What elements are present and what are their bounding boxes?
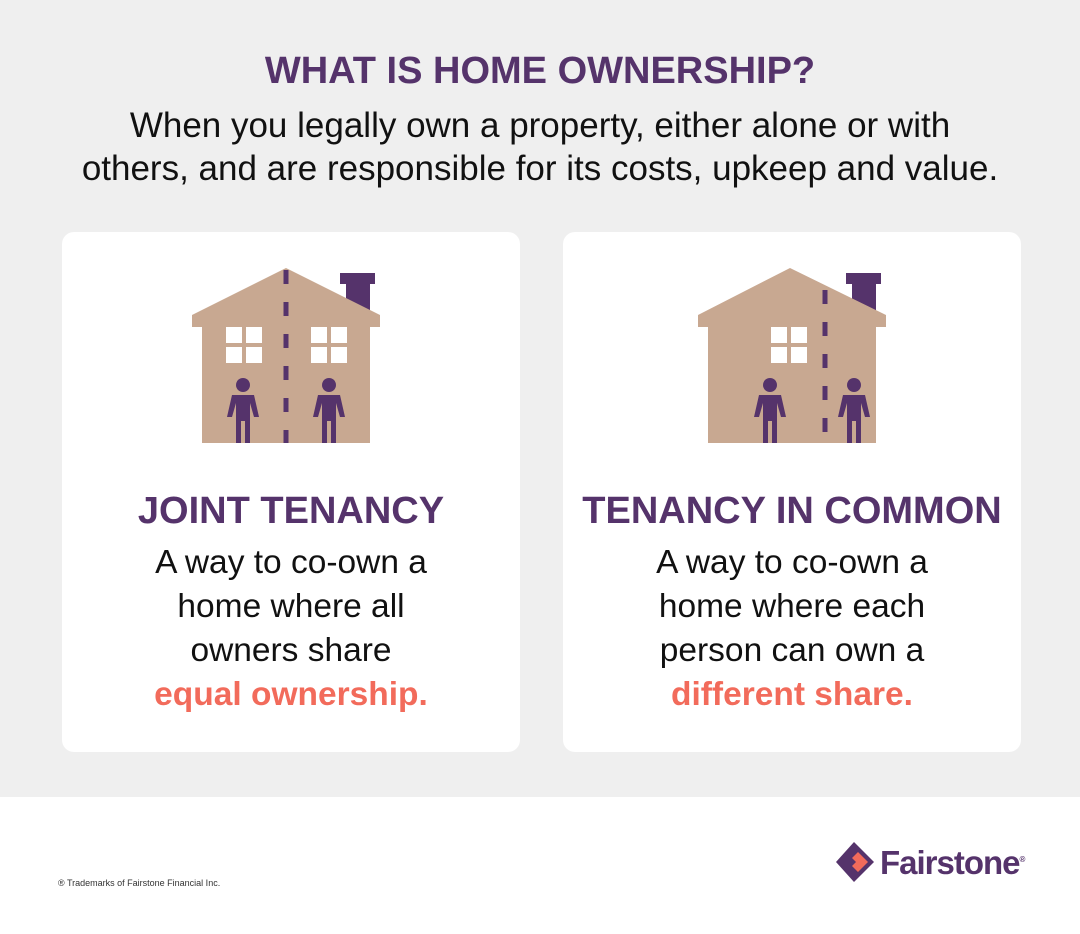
text: A way to co-own a (155, 544, 427, 581)
heading: JOINT TENANCY (138, 490, 444, 532)
icon: house split equally (192, 268, 380, 443)
text: A way to co-own a (656, 544, 928, 581)
text: different share. (671, 676, 913, 713)
text: home where each (659, 588, 925, 625)
subtitle: When you legally own a property, either alone or with (130, 106, 950, 145)
text (154, 544, 428, 713)
title: WHAT IS HOME OWNERSHIP? (265, 50, 815, 92)
text (656, 544, 928, 713)
footnote: ® Trademarks of Fairstone Financial Inc. (58, 878, 220, 888)
icon: house split unequally (698, 268, 886, 443)
panel: tenancy in common (563, 232, 1021, 752)
panel: joint tenancy (62, 232, 520, 752)
text: owners share (190, 632, 392, 669)
text: equal ownership. (154, 676, 428, 713)
heading: TENANCY IN COMMON (582, 490, 1002, 532)
text: home where all (177, 588, 405, 625)
subtitle (82, 106, 998, 188)
subtitle: others, and are responsible for its costs, upkeep and value. (82, 149, 998, 188)
text: person can own a (660, 632, 924, 669)
logo: Fairstone: Fairstone® (880, 844, 1024, 881)
